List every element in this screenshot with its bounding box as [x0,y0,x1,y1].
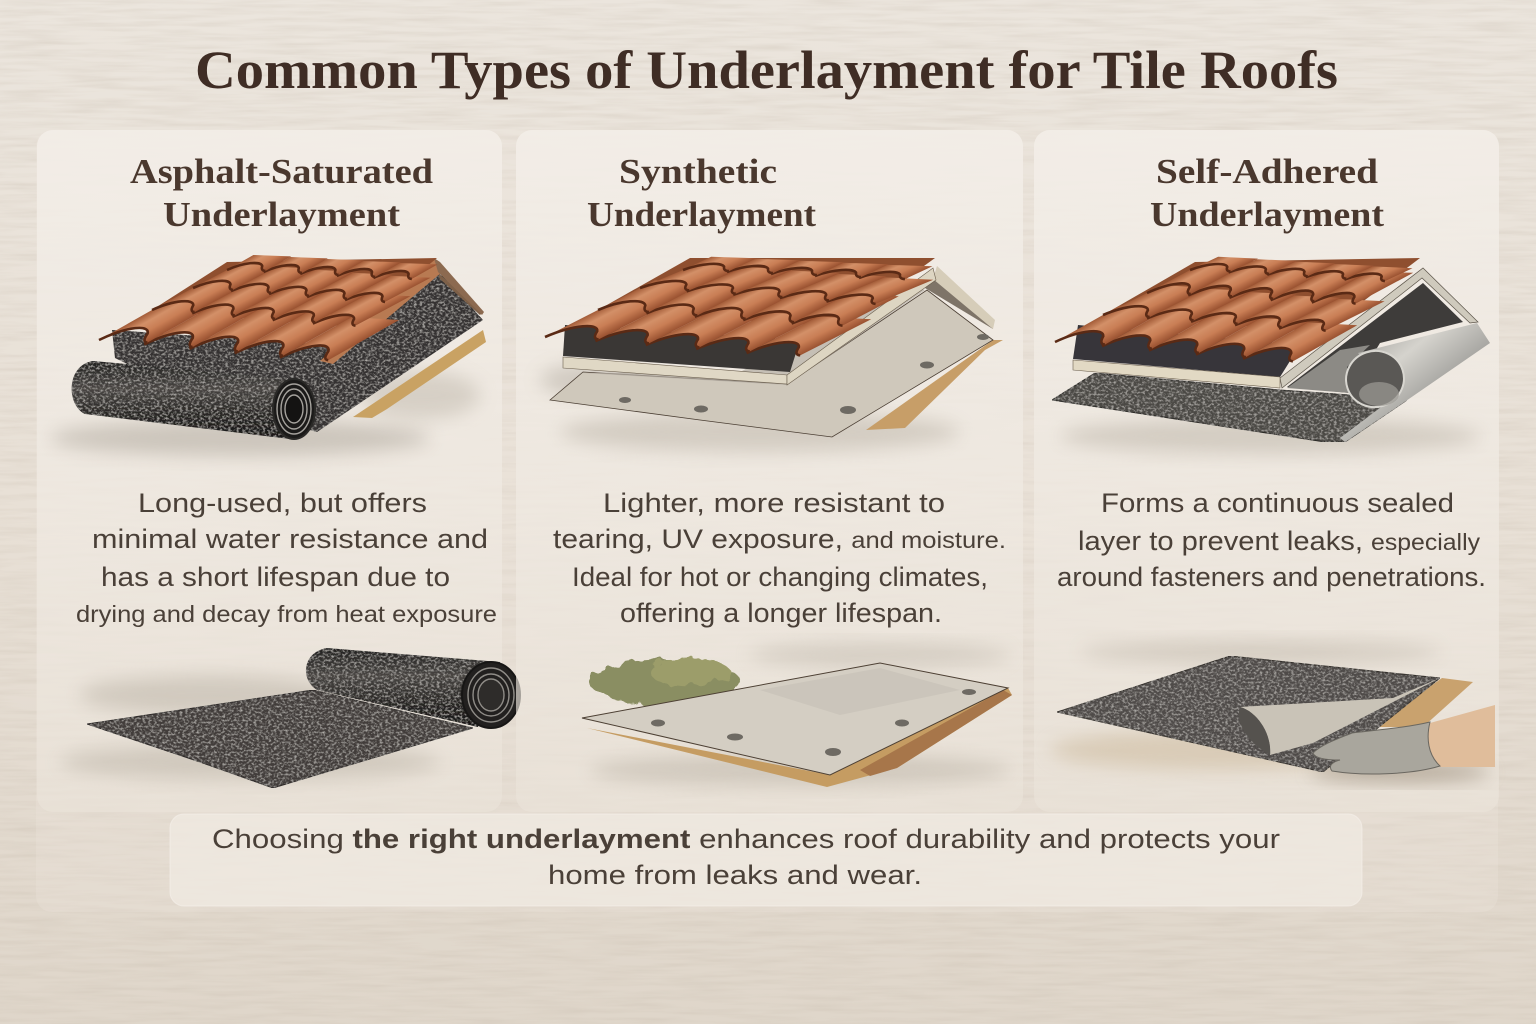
description: drying and decay from heat exposure [76,601,497,627]
illustration: tile roof over synthetic sheet [540,256,1003,452]
description: offering a longer lifespan. [620,598,942,628]
description: has a short lifespan due to [101,562,450,592]
description: layer to prevent leaks, especially [1078,526,1481,556]
panel: asphalt-saturated underlayment [37,130,520,812]
illustration: synthetic sheet with fasteners [582,643,1012,787]
heading: self-adhered: Underlayment [1150,195,1384,234]
illustration: tile roof over asphalt felt with roll [50,254,486,456]
callout: closing message: home from leaks and wear. [548,860,922,890]
panel: synthetic underlayment [516,130,1023,812]
callout: closing message: Choosing the right underlayment enhances roof durability and protects your [212,824,1280,854]
description: Ideal for hot or changing climates, [572,562,988,592]
panel: self-adhered underlayment [1034,130,1499,812]
description: minimal water resistance and [92,524,488,554]
description: Lighter, more resistant to [603,488,945,518]
heading: synthetic: Underlayment [587,195,816,234]
description: Forms a continuous sealed [1101,488,1454,518]
description: around fasteners and penetrations. [1057,562,1486,592]
description [553,488,1006,628]
heading: asphalt-saturated: Asphalt-Saturated [130,152,434,191]
description: tearing, UV exposure, and moisture. [553,524,1006,554]
illustration: hand pressing peeled membrane [1050,640,1495,782]
illustration: unrolled asphalt felt [60,648,520,788]
illustration: tile roof with peeling self-adhered membrane [1052,256,1490,454]
heading: asphalt-saturated: Underlayment [163,195,400,234]
description [1057,488,1486,592]
heading: synthetic: Synthetic [619,152,777,191]
description [76,488,497,627]
callout: closing message [170,814,1362,906]
title: Common Types of Underlayment for Tile Roofs [195,40,1338,100]
heading: self-adhered: Self-Adhered [1156,152,1379,191]
description: Long-used, but offers [138,488,427,518]
